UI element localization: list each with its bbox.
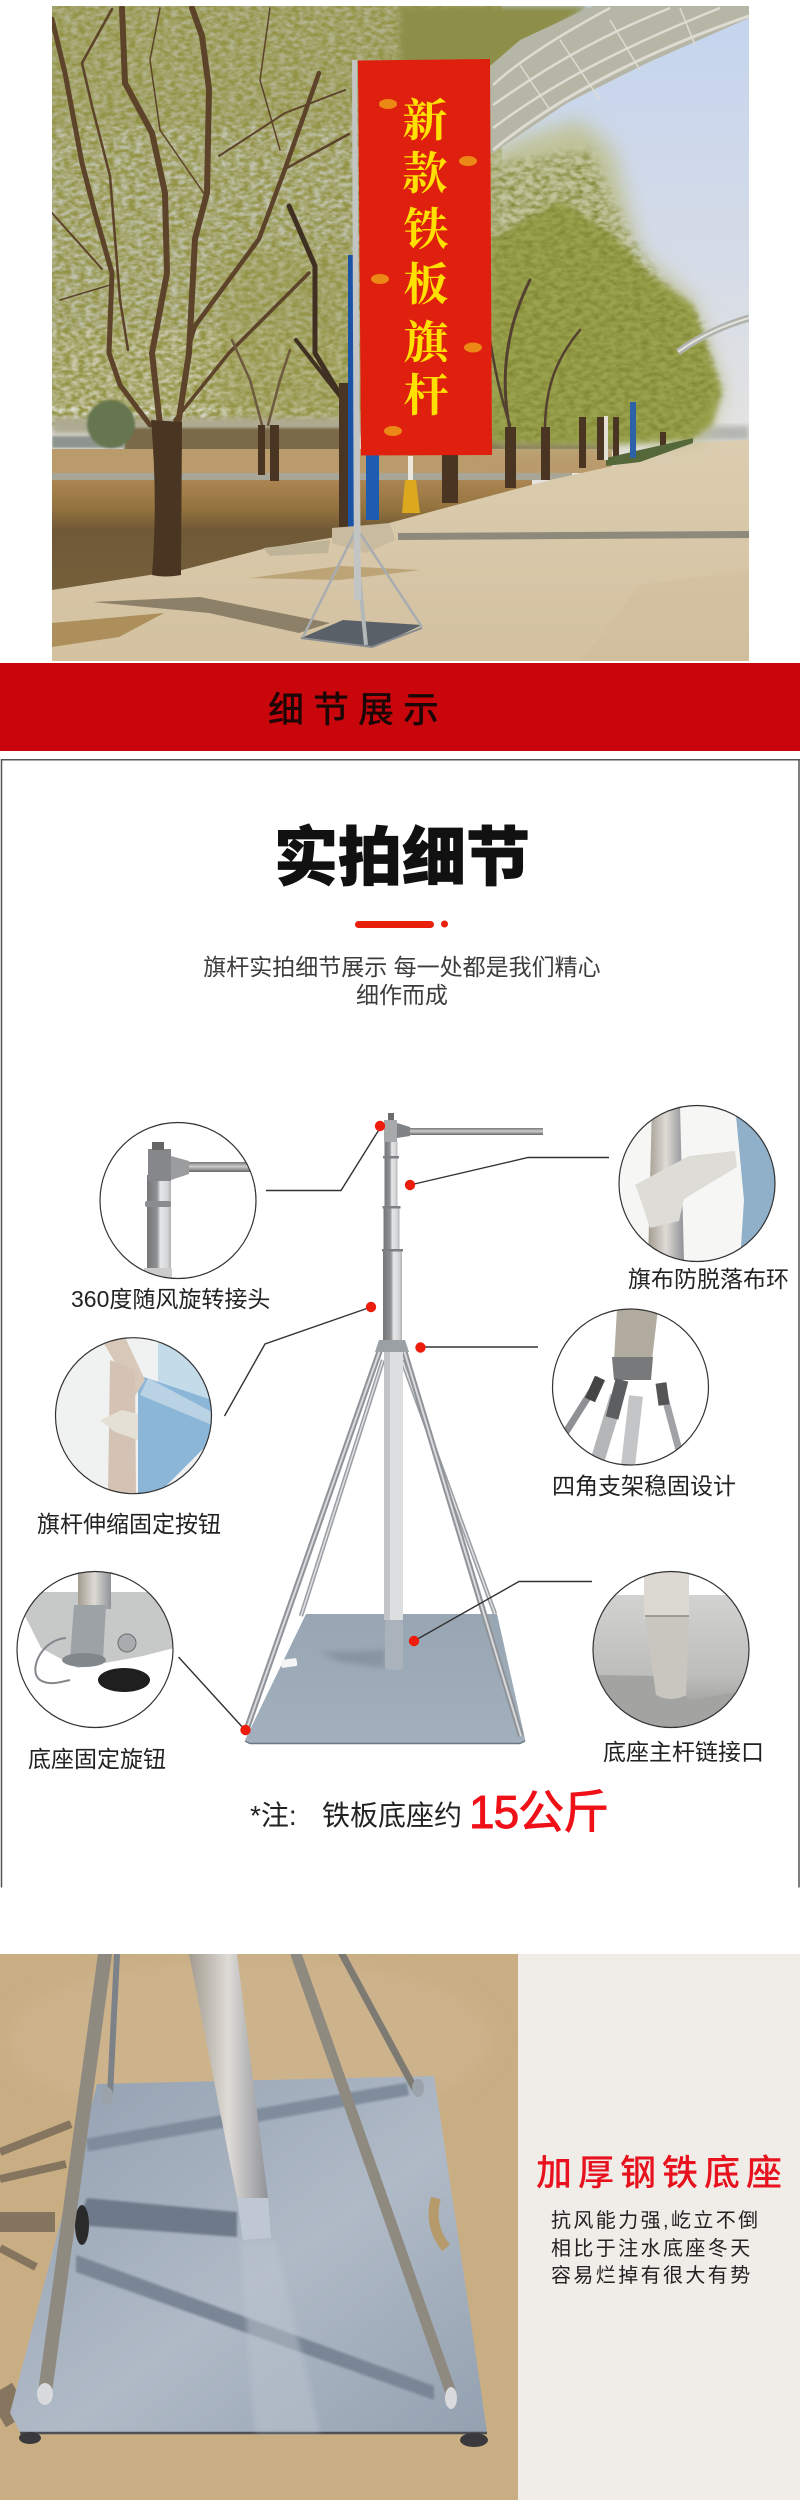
support legs bbox=[46, 1954, 450, 2390]
label: base knob: 底座固定旋钮 bbox=[28, 1746, 166, 1772]
willow row foliage bbox=[490, 120, 722, 442]
hero photo: flag pole on tree-lined road: 铁 bbox=[403, 193, 449, 258]
label: telescopic lock button: 旗杆伸缩固定按钮 bbox=[37, 1511, 221, 1537]
hero photo: flag pole on tree-lined road: 款 bbox=[402, 137, 448, 202]
red section banner bbox=[0, 663, 800, 751]
subtitle bbox=[203, 954, 601, 1008]
hero photo: flag pole on tree-lined road: 板 bbox=[403, 248, 449, 313]
hero photo: flag pole on tree-lined road: 杆 bbox=[403, 359, 449, 424]
subtitle: 细作而成 bbox=[356, 982, 448, 1008]
panel body text: 抗风能力强,屹立不倒 bbox=[551, 2209, 761, 2232]
steel plate bbox=[10, 2076, 487, 2432]
pale foliage tint bbox=[52, 6, 502, 406]
detail circle: swivel joint bbox=[100, 1122, 256, 1280]
flag pole bbox=[352, 60, 361, 600]
plate shadows bbox=[76, 2089, 434, 2400]
label: swivel joint: 360度随风旋转接头 bbox=[71, 1286, 270, 1312]
base plate bbox=[245, 1614, 526, 1743]
panel: photographed details bbox=[2, 760, 800, 1888]
concrete block bbox=[332, 523, 395, 553]
wheels bbox=[460, 2433, 488, 2447]
hero photo: flag pole on tree-lined road: 新 bbox=[402, 84, 448, 149]
mast bbox=[189, 1954, 268, 2198]
stand base on road bbox=[301, 620, 422, 647]
field and path bbox=[52, 449, 612, 473]
right tree branches bbox=[490, 280, 580, 430]
central flag pole diagram bbox=[245, 1113, 543, 1744]
text panel: thick steel base bbox=[518, 1954, 800, 2500]
detail circle: base mast socket bbox=[592, 1571, 750, 1729]
detail circle: base knob bbox=[16, 1571, 174, 1729]
swivel head and arm bbox=[410, 1128, 543, 1135]
panel body text bbox=[551, 2209, 761, 2287]
label: anti-drop ring: 旗布防脱落布环 bbox=[628, 1266, 789, 1292]
banner heading: 细节展示 bbox=[268, 689, 448, 730]
red marker dots bbox=[240, 1121, 426, 1735]
back legs bbox=[301, 1360, 495, 1616]
front legs bbox=[246, 1350, 521, 1736]
detail circle: anti-drop ring bbox=[619, 1105, 776, 1262]
hero photo: flag pole on tree-lined road bbox=[52, 6, 749, 661]
blue posts and bollard bbox=[348, 255, 354, 527]
plate holes bbox=[75, 2205, 89, 2245]
subtitle: 旗杆实拍细节展示 每一处都是我们精心 bbox=[203, 954, 601, 980]
road bbox=[52, 440, 749, 661]
base photo bbox=[0, 1954, 518, 2500]
detail circle: four-corner bracket bbox=[552, 1309, 709, 1466]
note: base plate weight: 铁板底座约 bbox=[322, 1800, 462, 1831]
label: base mast socket: 底座主杆链接口 bbox=[603, 1739, 764, 1765]
note: base plate weight: 15公斤 bbox=[469, 1786, 608, 1838]
red flag bbox=[358, 59, 492, 456]
red accent bar and dot bbox=[355, 920, 448, 928]
title: 实拍细节 bbox=[274, 822, 530, 894]
distant treeline bbox=[52, 414, 361, 437]
leader lines bbox=[178, 1128, 609, 1730]
detail circle: telescopic lock button bbox=[55, 1337, 212, 1494]
label: four-corner bracket: 四角支架稳固设计 bbox=[552, 1473, 736, 1499]
note: base plate weight: *注: bbox=[250, 1800, 297, 1831]
steel truss arch bbox=[490, 6, 749, 155]
hero photo: flag pole on tree-lined road: 旗 bbox=[403, 306, 450, 371]
top foliage above flag bbox=[400, 6, 590, 70]
ground shadows bbox=[0, 2124, 71, 2420]
panel body text: 容易烂掉有很大有势 bbox=[551, 2264, 753, 2287]
hedge bbox=[606, 438, 693, 466]
note: base plate weight bbox=[250, 1786, 608, 1838]
branches bbox=[52, 8, 349, 425]
panel heading: 加厚钢铁底座 bbox=[536, 2152, 788, 2193]
trunks bbox=[151, 383, 666, 576]
mast bbox=[384, 1142, 398, 1207]
panel body text: 相比于注水底座冬天 bbox=[551, 2237, 753, 2260]
leaf texture left bbox=[52, 6, 502, 426]
leg caps bbox=[37, 2079, 457, 2409]
hub bbox=[375, 1340, 409, 1352]
